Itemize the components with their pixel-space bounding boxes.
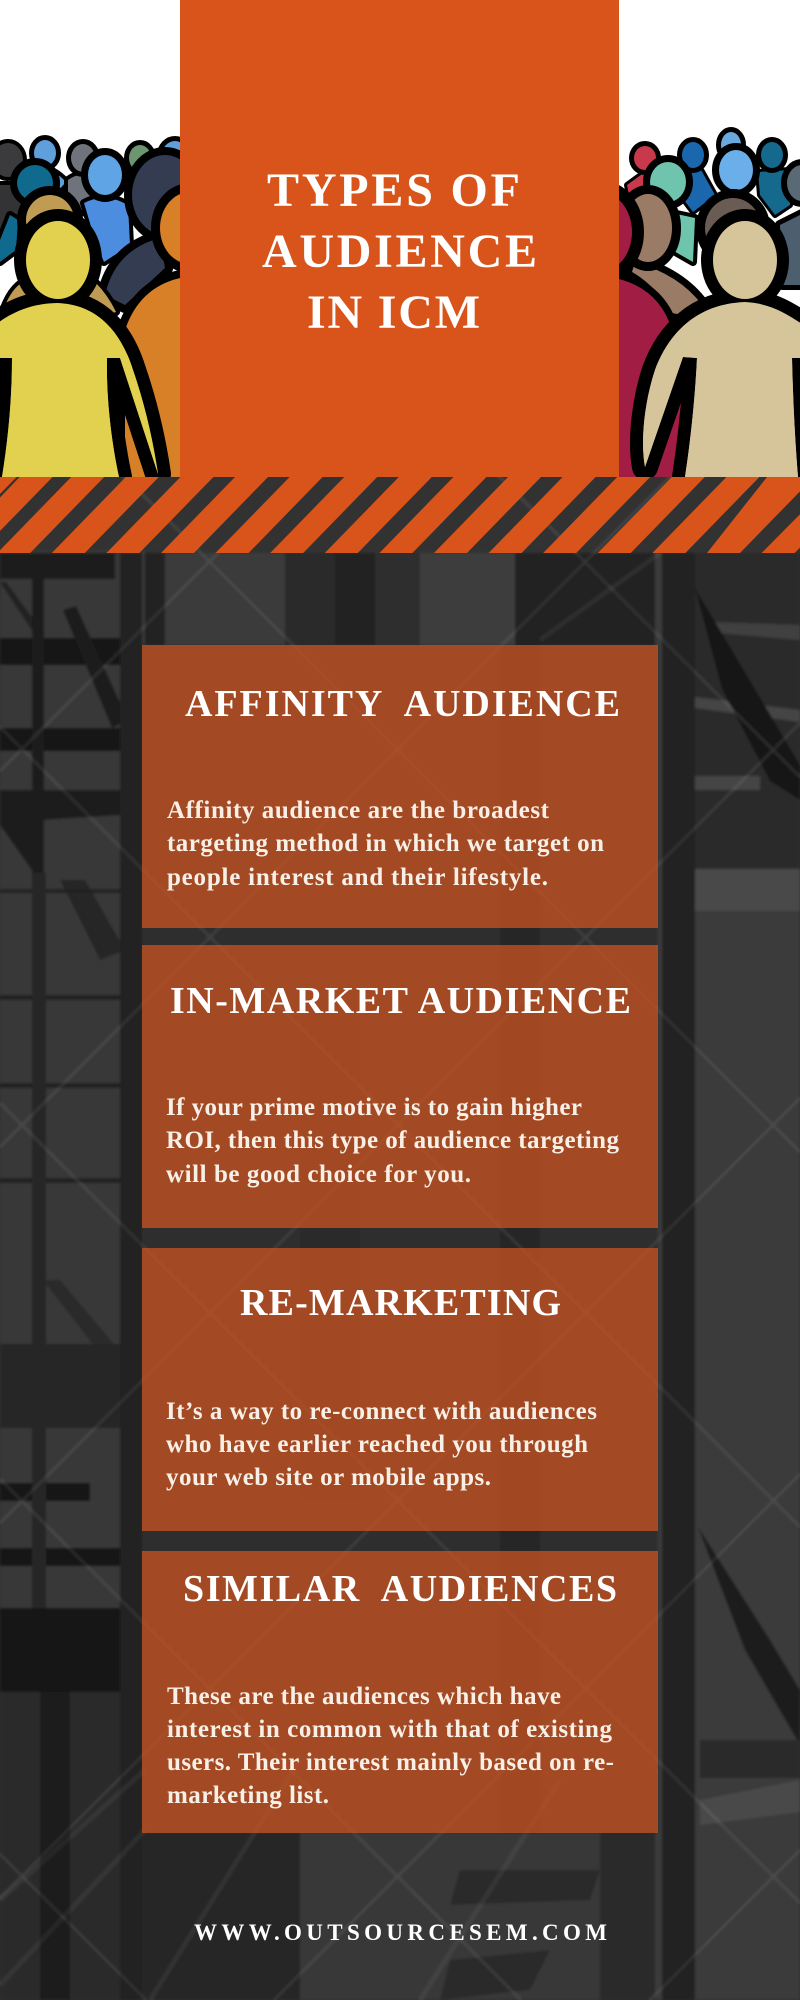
title <box>262 164 537 339</box>
text: re-marketing description <box>166 1398 597 1491</box>
heading: affinity audience: AFFINITY AUDIENCE <box>185 683 620 725</box>
heading: re-marketing: RE-MARKETING <box>240 1282 561 1324</box>
person: beige figure <box>643 221 800 477</box>
text: re-marketing description: who have earlier reached you through <box>166 1431 588 1458</box>
panel: re-marketing <box>142 1248 658 1531</box>
text: in-market description: If your prime motive is to gain higher <box>166 1094 582 1121</box>
footer website: WWW.OUTSOURCESEM.COM <box>194 1920 607 1945</box>
title: AUDIENCE <box>262 225 537 278</box>
text: affinity description <box>167 797 604 891</box>
text: affinity description: people interest and their lifestyle. <box>167 864 548 891</box>
text: affinity description: targeting method in which we target on <box>167 830 604 857</box>
crowd left of title <box>0 135 180 477</box>
title: IN ICM <box>307 286 480 339</box>
text: similar description <box>167 1683 614 1809</box>
text: similar description: users. Their interest mainly based on re- <box>167 1749 614 1776</box>
text: in-market description: will be good choice for you. <box>166 1161 471 1188</box>
text: similar description: interest in common with that of existing <box>167 1716 612 1743</box>
text: similar description: These are the audiences which have <box>167 1683 561 1710</box>
title: TYPES OF <box>267 164 520 217</box>
crowd right of title <box>619 127 800 477</box>
text: similar description: marketing list. <box>167 1782 329 1809</box>
text: re-marketing description: your web site or mobile apps. <box>166 1464 491 1491</box>
heading: similar audiences: SIMILAR AUDIENCES <box>183 1568 617 1610</box>
text: re-marketing description: It’s a way to re-connect with audiences <box>166 1398 597 1425</box>
panel: in-market audience <box>142 945 658 1228</box>
text: affinity description: Affinity audience are the broadest <box>167 797 550 824</box>
text: in-market description: ROI, then this type of audience targeting <box>166 1127 620 1154</box>
text: in-market description <box>166 1094 620 1188</box>
background: base tone <box>0 477 800 2000</box>
title banner <box>180 0 619 477</box>
panel: affinity audience <box>142 645 658 928</box>
person: yellow figure <box>0 221 158 477</box>
panel: similar audiences <box>142 1551 658 1833</box>
hazard stripe band <box>0 477 800 553</box>
heading: in-market audience: IN-MARKET AUDIENCE <box>170 980 631 1022</box>
